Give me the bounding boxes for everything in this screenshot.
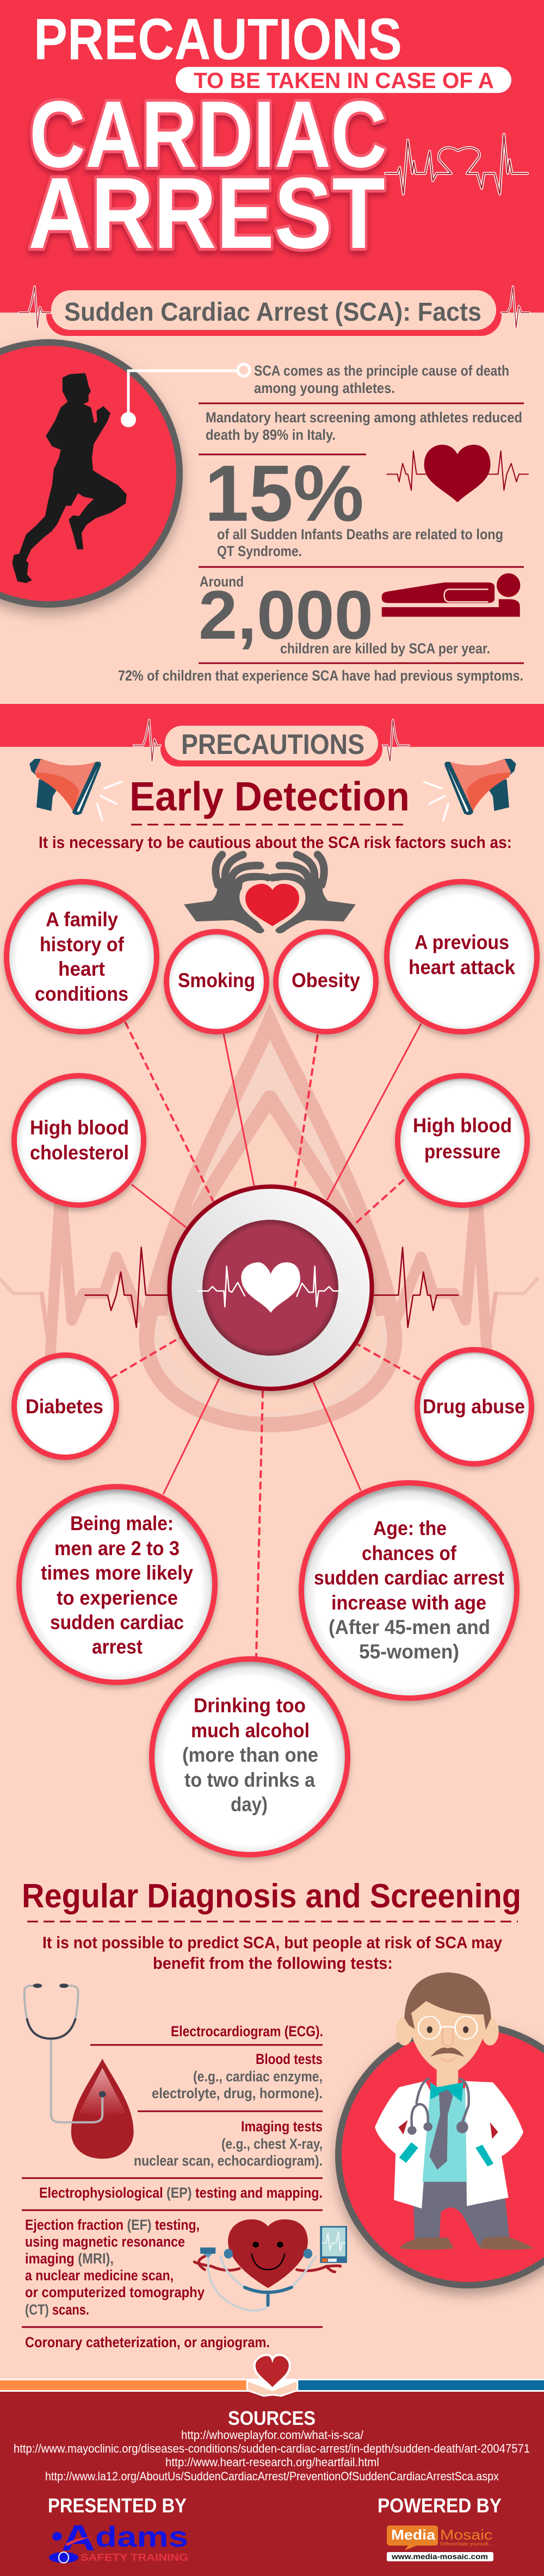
risk factor: obesity: Obesity bbox=[292, 969, 360, 991]
source links: http://www.la12.org/AboutUs/SuddenCardiacArrest/PreventionOfSuddenCardiacArrestSca.aspx bbox=[45, 2469, 499, 2483]
background: red precautions band bbox=[0, 704, 544, 747]
risk factor: drinking alcohol: to two drinks a bbox=[184, 1769, 315, 1791]
logo: media mosaic: Differentiate yourself... bbox=[440, 2541, 492, 2547]
risk factor: family history bbox=[7, 882, 157, 1032]
logo: media mosaic: Media bbox=[391, 2527, 436, 2543]
risk factor: drinking alcohol: (more than one bbox=[182, 1744, 318, 1766]
icon: blood drop with stethoscope bbox=[24, 1984, 134, 2159]
test: imaging tests: Imaging tests bbox=[241, 2118, 323, 2135]
risk factor: being male bbox=[19, 1487, 215, 1682]
logo: adams safety training bbox=[49, 2518, 188, 2563]
risk factor: smoking: Smoking bbox=[178, 969, 255, 991]
risk factor: being male: times more likely bbox=[41, 1562, 193, 1584]
risk factor: age: chances of bbox=[362, 1542, 457, 1564]
test: blood tests: electrolyte, drug, hormone). bbox=[152, 2085, 323, 2101]
heading: powered by: POWERED BY bbox=[378, 2494, 502, 2517]
stat: 15%: 15% bbox=[205, 449, 364, 538]
panel: runner circle bbox=[0, 339, 250, 608]
risk factor: family history: A family bbox=[46, 908, 118, 931]
risk factor: drinking alcohol: day) bbox=[231, 1793, 268, 1816]
risk factor: family history: history of bbox=[40, 933, 125, 956]
heading: facts: Sudden Cardiac Arrest (SCA): Facts bbox=[64, 298, 481, 327]
risk factor: previous heart attack: heart attack bbox=[409, 956, 515, 978]
fact: principal cause of death bbox=[254, 363, 509, 396]
risk factor: diabetes bbox=[14, 1355, 116, 1457]
test: ejection fraction: or computerized tomography bbox=[25, 2284, 205, 2300]
intro text: tests: It is not possible to predict SCA, but people at risk of SCA may bbox=[42, 1933, 503, 1952]
fact: heart screening: death by 89% in Italy. bbox=[206, 427, 336, 443]
risk factor: high blood pressure bbox=[398, 1076, 527, 1205]
risk factor: high blood pressure: pressure bbox=[424, 1140, 500, 1163]
risk factor: age: (After 45-men and bbox=[329, 1616, 490, 1638]
icon: small heartbeats bbox=[134, 720, 409, 761]
fact: long QT: of all Sudden Infants Deaths are related to long bbox=[217, 526, 503, 542]
risk factor: age bbox=[301, 1483, 517, 1698]
title: cardiac: CARDIAC bbox=[29, 81, 387, 187]
callout connector bbox=[121, 364, 250, 427]
background: red header bbox=[0, 0, 544, 313]
risk factor: age: sudden cardiac arrest bbox=[314, 1567, 504, 1589]
source links bbox=[14, 2428, 530, 2483]
fact: heart screening bbox=[206, 409, 522, 443]
panel: doctor circle bbox=[335, 1973, 544, 2288]
background: pale heartbeat bands bbox=[0, 1184, 537, 1354]
test: electrophysiological: Electrophysiological (EP) testing and mapping. bbox=[39, 2185, 323, 2201]
risk factor: being male: men are 2 to 3 bbox=[54, 1537, 180, 1560]
risk factor: previous heart attack: A previous bbox=[415, 931, 509, 953]
icon: right megaphone bbox=[424, 759, 516, 821]
test: ejection fraction: using magnetic resonance bbox=[25, 2234, 185, 2250]
divider: orange and blue bar bbox=[0, 2379, 544, 2392]
label: around: Around bbox=[200, 573, 244, 590]
source links: http://www.heart-research.org/heartfail.html bbox=[165, 2455, 379, 2469]
logo: media mosaic: Mosaic bbox=[440, 2527, 492, 2543]
heading: presented by: PRESENTED BY bbox=[48, 2494, 187, 2517]
connectors: risk factors to centre bbox=[110, 1022, 421, 1657]
test: blood tests: (e.g., cardiac enzyme, bbox=[193, 2068, 323, 2085]
background: peach facts area bbox=[0, 313, 544, 704]
logo: adams safety training: A bbox=[61, 2518, 95, 2559]
fact: long QT: QT Syndrome. bbox=[217, 543, 302, 559]
risk factor: being male: Being male: bbox=[70, 1512, 174, 1535]
risk factor: drinking alcohol: much alcohol bbox=[191, 1719, 310, 1742]
heading: regular diagnosis and screening: Regular Diagnosis and Screening bbox=[22, 1878, 521, 1915]
intro text: tests: benefit from the following tests: bbox=[153, 1954, 393, 1973]
heading: early detection: Early Detection bbox=[129, 774, 410, 819]
risk factor: drinking alcohol: Drinking too bbox=[194, 1694, 306, 1717]
logo: adams safety training: dams bbox=[95, 2521, 188, 2553]
icon: runner silhouette bbox=[12, 373, 127, 583]
risk factor: being male: sudden cardiac bbox=[50, 1611, 184, 1633]
test: imaging tests bbox=[134, 2118, 323, 2169]
fact: long QT bbox=[217, 526, 503, 559]
test: ejection fraction: Ejection fraction (EF) testing, bbox=[25, 2217, 200, 2233]
risk factor: high blood cholesterol: cholesterol bbox=[30, 1142, 129, 1164]
risk factor: obesity bbox=[276, 932, 376, 1032]
risk factor: family history: conditions bbox=[35, 983, 128, 1005]
icon: heart with pulse bbox=[387, 445, 528, 502]
risk factor: smoking bbox=[166, 932, 267, 1032]
panel: precautions banner bbox=[134, 720, 409, 766]
test: ejection fraction: (CT) scans. bbox=[25, 2301, 89, 2318]
test: ejection fraction: a nuclear medicine scan, bbox=[25, 2267, 174, 2284]
heading: precautions: PRECAUTIONS bbox=[181, 729, 364, 760]
test: blood tests bbox=[152, 2051, 323, 2101]
test: coronary catheterization: Coronary catheterization, or angiogram. bbox=[25, 2334, 270, 2350]
fact: principal cause of death: among young athletes. bbox=[254, 380, 395, 396]
risk factor: high blood cholesterol bbox=[14, 1076, 144, 1205]
risk factor: age: Age: the bbox=[373, 1517, 447, 1539]
icon: small heartbeats bbox=[19, 286, 529, 328]
risk factor: diabetes: Diabetes bbox=[26, 1395, 103, 1418]
icon: central heart disc bbox=[170, 1187, 372, 1389]
test: imaging tests: (e.g., chest X-ray, bbox=[221, 2136, 323, 2152]
background: blood drop outlines bbox=[146, 1022, 395, 1425]
heading: sources: SOURCES bbox=[228, 2407, 316, 2429]
icon: hands holding heart bbox=[247, 2355, 298, 2396]
logo: media mosaic: www.media-mosaic.com bbox=[391, 2552, 488, 2561]
risk factor: high blood cholesterol: High blood bbox=[30, 1117, 129, 1139]
icon: person lying on bed bbox=[382, 573, 520, 617]
background: peach main area bbox=[0, 747, 544, 2392]
risk factor: being male: arrest bbox=[92, 1636, 143, 1658]
icon: doctor bbox=[375, 1973, 534, 2250]
risk factor: drug abuse bbox=[417, 1350, 531, 1464]
icon: left megaphone bbox=[29, 759, 121, 821]
test: ejection fraction: imaging (MRI), bbox=[25, 2250, 114, 2267]
panel: facts heading banner bbox=[19, 286, 529, 336]
panel: title header bbox=[28, 6, 528, 270]
title: arrest: ARREST bbox=[28, 157, 385, 270]
risk factor: previous heart attack bbox=[387, 882, 537, 1032]
risk factor: age: 55-women) bbox=[359, 1641, 459, 1663]
stat: 2,000: 2,000 bbox=[199, 576, 373, 653]
logo: media mosaic bbox=[387, 2525, 493, 2561]
panel: facts text bbox=[118, 363, 528, 684]
title: precautions: PRECAUTIONS bbox=[34, 6, 402, 72]
icon: hands holding a heart bbox=[184, 854, 356, 933]
subtitle pill: TO BE TAKEN IN CASE OF A bbox=[194, 68, 494, 93]
risk factor: high blood pressure: High blood bbox=[413, 1114, 512, 1137]
fact: children killed: children are killed by SCA per year. bbox=[280, 640, 490, 657]
icon: heart character with stethoscope bbox=[194, 2219, 347, 2311]
risk factor: drug abuse: Drug abuse bbox=[423, 1395, 525, 1418]
icon: dark heartbeat lines bbox=[85, 1248, 458, 1327]
risk factor: family history: heart bbox=[58, 958, 105, 980]
logo: adams safety training: SAFETY TRAINING bbox=[81, 2552, 188, 2563]
test: imaging tests: nuclear scan, echocardiogram). bbox=[134, 2153, 323, 2169]
test: blood tests: Blood tests bbox=[256, 2051, 323, 2067]
panel: footer bbox=[0, 2355, 544, 2576]
risk factor: age: increase with age bbox=[331, 1592, 486, 1614]
icon: heartbeat line with heart bbox=[385, 134, 528, 194]
source links: http://whoweplayfor.com/what-is-sca/ bbox=[181, 2428, 364, 2442]
panel: diagnostic tests list bbox=[22, 2023, 323, 2350]
test: ECG: Electrocardiogram (ECG). bbox=[171, 2023, 323, 2039]
risk factor: drinking alcohol bbox=[152, 1659, 348, 1855]
intro text: tests bbox=[42, 1933, 503, 1973]
test: ejection fraction bbox=[25, 2217, 205, 2318]
risk factor: being male: to experience bbox=[57, 1587, 178, 1609]
